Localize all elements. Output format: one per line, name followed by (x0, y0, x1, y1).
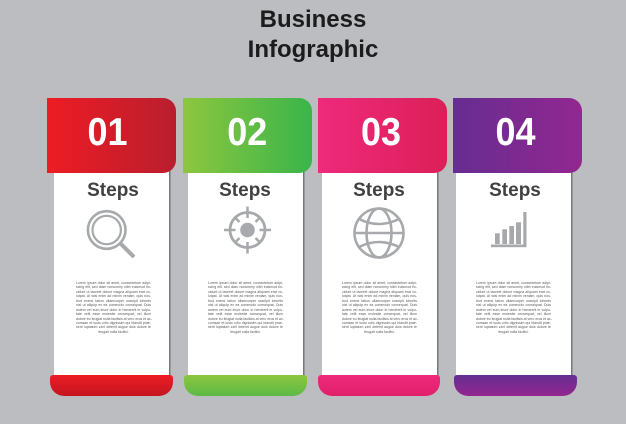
footer band (318, 374, 440, 396)
body text: trud exerci tation ullamcorper suscipit lobortis (342, 299, 417, 303)
body text: nisl ut aliquip ex ea commodo consequat. Duis (476, 303, 551, 307)
heading: Steps (489, 180, 541, 200)
body text (342, 281, 418, 334)
body text: sent luptatum zzril delenit augue duis dolore te (476, 325, 551, 329)
body text: lutpat. Ut wisi enim ad minim veniam, quis nos- (342, 294, 417, 298)
body text: cidunt ut laoreet dolore magna aliquam erat vo- (208, 290, 283, 294)
body text: Lorem ipsum dolor sit amet, consectetuer adipi- (476, 281, 551, 285)
body text: autem vel eum iriure dolor in hendrerit in vulpu- (76, 308, 151, 312)
body text: nisl ut aliquip ex ea commodo consequat. Duis (208, 303, 283, 307)
panel body (54, 165, 169, 377)
body text: lutpat. Ut wisi enim ad minim veniam, quis nos- (76, 294, 151, 298)
body text: dolore eu feugiat nulla facilisis at vero eros et ac- (208, 316, 284, 320)
footer band (454, 374, 577, 396)
body text: feugait nulla facilisi. (498, 330, 529, 334)
body text: autem vel eum iriure dolor in hendrerit in vulpu- (476, 308, 551, 312)
body text: tate velit esse molestie consequat, vel illum (208, 312, 283, 316)
body text: Lorem ipsum dolor sit amet, consectetuer adipi- (76, 281, 151, 285)
panel body (322, 165, 437, 377)
header band (47, 98, 176, 173)
body text: lutpat. Ut wisi enim ad minim veniam, quis nos- (476, 294, 551, 298)
body text: scing elit, sed diam nonummy nibh euismod tin- (342, 285, 417, 289)
heading: Steps (87, 180, 139, 200)
step number: 01 (87, 109, 128, 154)
body text: dolore eu feugiat nulla facilisis at vero eros et ac- (476, 316, 552, 320)
body text: scing elit, sed diam nonummy nibh euismod tin- (476, 285, 551, 289)
body text: tate velit esse molestie consequat, vel illum (342, 312, 417, 316)
step number: 03 (361, 109, 401, 154)
body text: dolore eu feugiat nulla facilisis at vero eros et ac- (342, 316, 418, 320)
title: Infographic (248, 36, 378, 62)
body text: trud exerci tation ullamcorper suscipit lobortis (476, 299, 551, 303)
step number: 02 (227, 109, 267, 154)
body text: cumsan et iusto odio dignissim qui blandit prae- (476, 321, 551, 325)
body text: cidunt ut laoreet dolore magna aliquam erat vo- (342, 290, 417, 294)
body text: sent luptatum zzril delenit augue duis dolore te (342, 325, 417, 329)
body text: autem vel eum iriure dolor in hendrerit in vulpu- (342, 308, 417, 312)
body text: lutpat. Ut wisi enim ad minim veniam, quis nos- (208, 294, 283, 298)
body text: feugait nulla facilisi. (364, 330, 395, 334)
step number: 04 (495, 109, 536, 154)
body text: trud exerci tation ullamcorper suscipit lobortis (208, 299, 283, 303)
icon: bar chart (491, 212, 526, 248)
title: Business (260, 6, 366, 33)
footer band (50, 374, 173, 396)
header band (183, 98, 312, 173)
body text: cumsan et iusto odio dignissim qui blandit prae- (342, 321, 417, 325)
body text: cidunt ut laoreet dolore magna aliquam erat vo- (476, 290, 551, 294)
body text: autem vel eum iriure dolor in hendrerit in vulpu- (208, 308, 283, 312)
body text: Lorem ipsum dolor sit amet, consectetuer adipi- (342, 281, 417, 285)
panel body (188, 165, 303, 377)
body text: Lorem ipsum dolor sit amet, consectetuer adipi- (208, 281, 283, 285)
body text: feugait nulla facilisi. (230, 330, 261, 334)
body text: feugait nulla facilisi. (98, 330, 129, 334)
body text: cumsan et iusto odio dignissim qui blandit prae- (76, 321, 151, 325)
body text: nisl ut aliquip ex ea commodo consequat. Duis (76, 303, 151, 307)
body text: scing elit, sed diam nonummy nibh euismod tin- (76, 285, 151, 289)
heading: Steps (219, 180, 271, 200)
body text (476, 281, 552, 334)
body text (76, 281, 152, 334)
icon: magnifier (86, 210, 136, 258)
body text: nisl ut aliquip ex ea commodo consequat. Duis (342, 303, 417, 307)
body text (208, 281, 284, 334)
body text: dolore eu feugiat nulla facilisis at vero eros et ac- (76, 316, 152, 320)
body text: tate velit esse molestie consequat, vel illum (476, 312, 551, 316)
panel body (456, 165, 571, 377)
icon: target (224, 206, 271, 254)
heading: Steps (353, 180, 405, 200)
footer band (184, 374, 307, 396)
body text: tate velit esse molestie consequat, vel illum (76, 312, 151, 316)
title (248, 6, 378, 62)
body text: sent luptatum zzril delenit augue duis dolore te (76, 325, 151, 329)
header band (453, 98, 582, 173)
header band (318, 98, 446, 173)
body text: scing elit, sed diam nonummy nibh euismod tin- (208, 285, 283, 289)
icon: globe (353, 207, 405, 259)
body text: trud exerci tation ullamcorper suscipit lobortis (76, 299, 151, 303)
body text: sent luptatum zzril delenit augue duis dolore te (208, 325, 283, 329)
body text: cidunt ut laoreet dolore magna aliquam erat vo- (76, 290, 151, 294)
body text: cumsan et iusto odio dignissim qui blandit prae- (208, 321, 283, 325)
